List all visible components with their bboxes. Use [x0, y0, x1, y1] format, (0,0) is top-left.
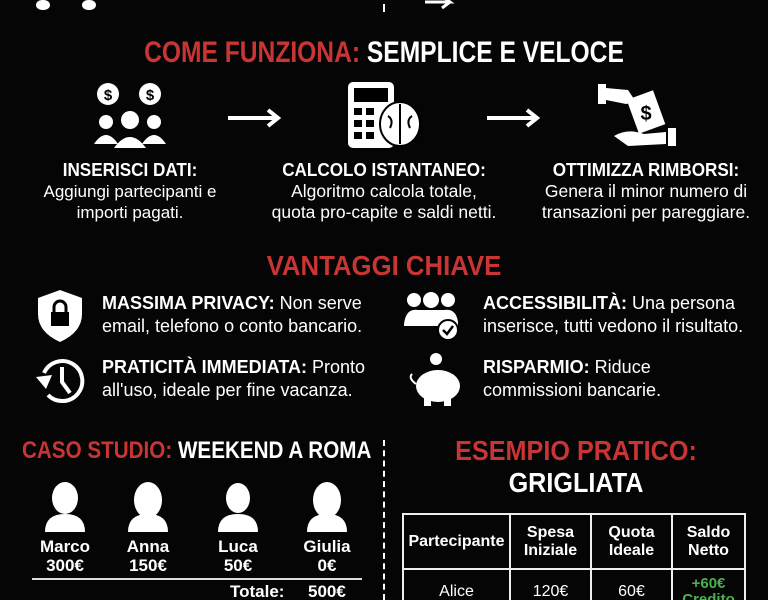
table: Ideale	[609, 542, 654, 558]
case study people: 0€	[318, 556, 336, 575]
benefit: praticita: all'uso, ideale per fine vacanza.	[102, 380, 353, 400]
case study people: 300€	[46, 556, 84, 575]
icon: clock history	[36, 359, 84, 403]
table: Spesa	[527, 524, 574, 540]
case study people: 50€	[224, 556, 252, 575]
case study people: Giulia	[303, 537, 351, 556]
dashed divider	[383, 440, 385, 600]
heading: caso studio: CASO STUDIO: WEEKEND A ROMA	[22, 437, 371, 464]
heading: esempio pratico: GRIGLIATA	[509, 467, 643, 498]
icon: people with dollars: $	[104, 87, 113, 104]
icon: group check	[404, 292, 458, 339]
step 1 text	[44, 160, 216, 222]
icon: calculator brain	[348, 82, 419, 148]
table: Quota	[608, 524, 655, 540]
step 2 text: CALCOLO ISTANTANEO:	[282, 160, 486, 180]
step 3 text: transazioni per pareggiare.	[542, 202, 750, 222]
benefit: accessibilita: ACCESSIBILITÀ: Una persona	[483, 293, 735, 313]
benefit: risparmio	[483, 357, 661, 400]
step 1 text: INSERISCI DATI:	[63, 160, 197, 180]
table: Partecipante	[408, 532, 505, 550]
step 3 text: Genera il minor numero di	[545, 181, 747, 201]
benefit: risparmio: commissioni bancarie.	[483, 380, 661, 400]
table: Alice	[439, 583, 474, 600]
heading: esempio pratico	[455, 435, 697, 498]
icon: people with dollars: $	[146, 87, 155, 104]
icon: shield	[38, 290, 82, 342]
table: 120€	[533, 583, 568, 600]
benefit: risparmio: RISPARMIO: Riduce	[483, 357, 651, 377]
step 1 text: importi pagati.	[77, 203, 183, 222]
step 3 text	[542, 160, 750, 222]
step 1 text: Aggiungi partecipanti e	[44, 182, 216, 201]
benefit: privacy	[102, 293, 362, 336]
case study people: Anna	[127, 537, 169, 556]
arrow 1	[228, 108, 282, 128]
benefit: praticita: PRATICITÀ IMMEDIATA: Pronto	[102, 357, 365, 377]
step 2 text	[272, 160, 496, 222]
case study people: Luca	[218, 537, 258, 556]
case study people: Marco	[40, 537, 90, 556]
step 2 text: Algoritmo calcola totale,	[291, 181, 477, 201]
title: vantaggi chiave: VANTAGGI CHIAVE	[267, 250, 501, 281]
benefit: praticita	[102, 356, 365, 400]
arrow 2	[487, 108, 540, 128]
icon: hand money: $	[640, 103, 652, 125]
icon: piggy bank	[410, 353, 460, 406]
icon: hand money	[598, 84, 676, 146]
table: Netto	[688, 542, 729, 558]
step 3 text: OTTIMIZZA RIMBORSI:	[553, 160, 739, 180]
table: Iniziale	[524, 542, 577, 558]
benefit: accessibilita	[483, 292, 743, 336]
case study people	[32, 482, 362, 600]
table: +60€	[692, 575, 725, 592]
benefit: privacy: MASSIMA PRIVACY: Non serve	[102, 293, 362, 313]
heading: esempio pratico: ESEMPIO PRATICO:	[455, 435, 697, 466]
benefit: accessibilita: inserisce, tutti vedono il risultato.	[483, 316, 743, 336]
table: Saldo	[687, 524, 730, 540]
title: come funziona: COME FUNZIONA: SEMPLICE E VELOCE	[144, 36, 624, 69]
step 2 text: quota pro-capite e saldi netti.	[272, 202, 496, 222]
case study people: 150€	[129, 556, 167, 575]
table	[402, 513, 746, 600]
top remnants	[36, 0, 454, 12]
icon: people with dollars	[94, 83, 166, 148]
benefit: privacy: email, telefono o conto bancario.	[102, 316, 362, 336]
table: 60€	[618, 583, 645, 600]
